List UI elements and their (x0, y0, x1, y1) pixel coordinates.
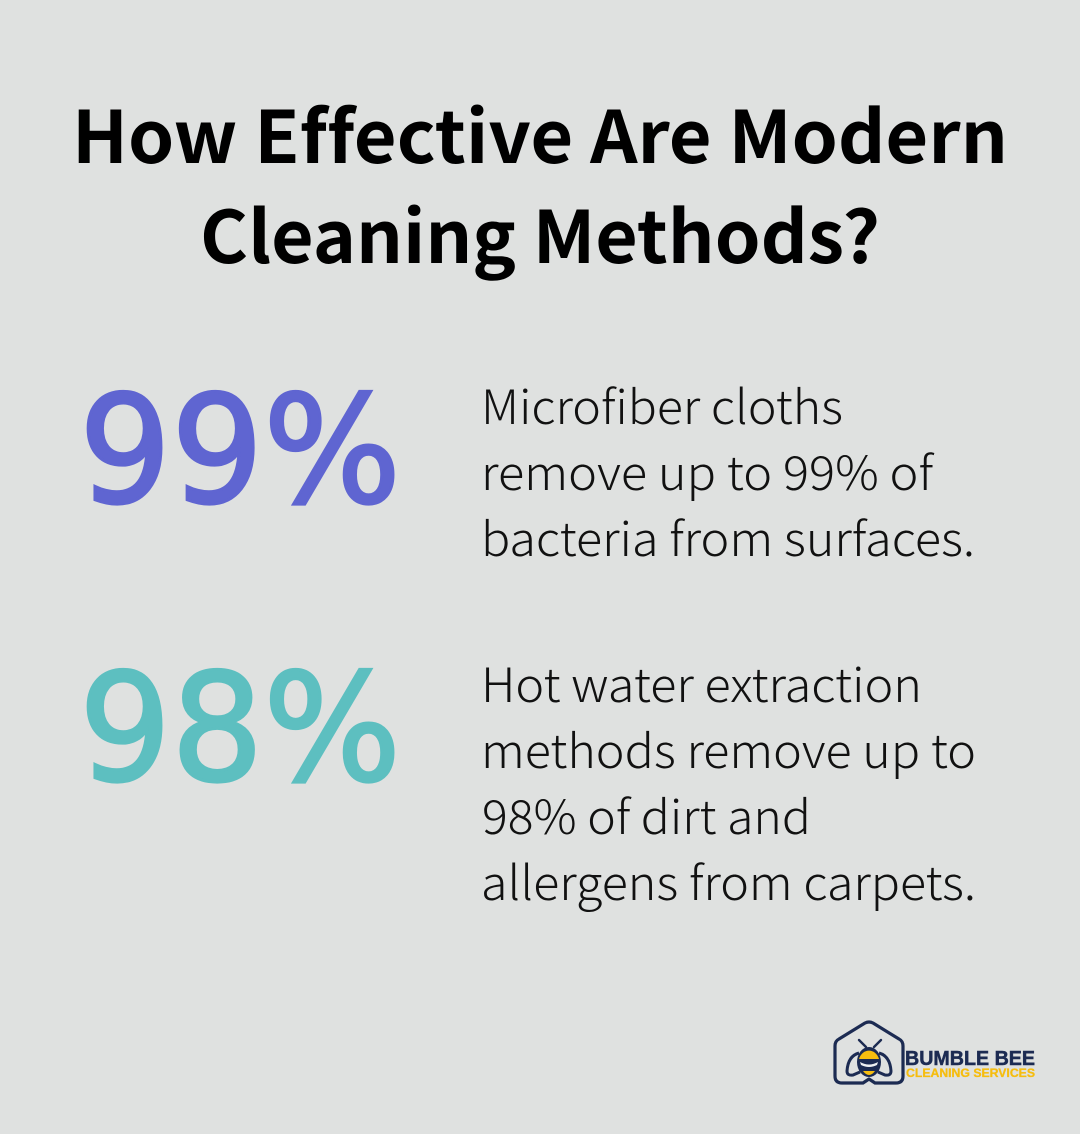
title: Cleaning Methods? (200, 179, 880, 284)
text block: microfiber cloths: Microfiber cloths (481, 369, 843, 438)
text block: hot water extraction: methods remove up to (481, 713, 976, 782)
text block: hot water extraction: Hot water extraction (481, 647, 922, 716)
text block: hot water extraction (481, 647, 976, 914)
text block: microfiber cloths (481, 369, 975, 570)
logo wordmark: BUMBLE BEE (905, 1048, 1035, 1070)
text block: hot water extraction: 98% of dirt and (482, 779, 811, 848)
text block: microfiber cloths: bacteria from surfaces. (481, 501, 975, 570)
logo: Bumble Bee Cleaning Services (835, 1022, 1035, 1083)
logo tagline: CLEANING SERVICES (906, 1066, 1035, 1080)
title: How Effective Are Modern (72, 79, 1008, 184)
title (72, 79, 1008, 284)
text block: microfiber cloths: remove up to 99% of (481, 435, 935, 504)
stat: 99%: 99% (79, 365, 401, 538)
icon: house with bee (835, 1022, 903, 1083)
stat: 98%: 98% (79, 643, 401, 816)
text block: hot water extraction: allergens from carpets. (481, 845, 976, 914)
